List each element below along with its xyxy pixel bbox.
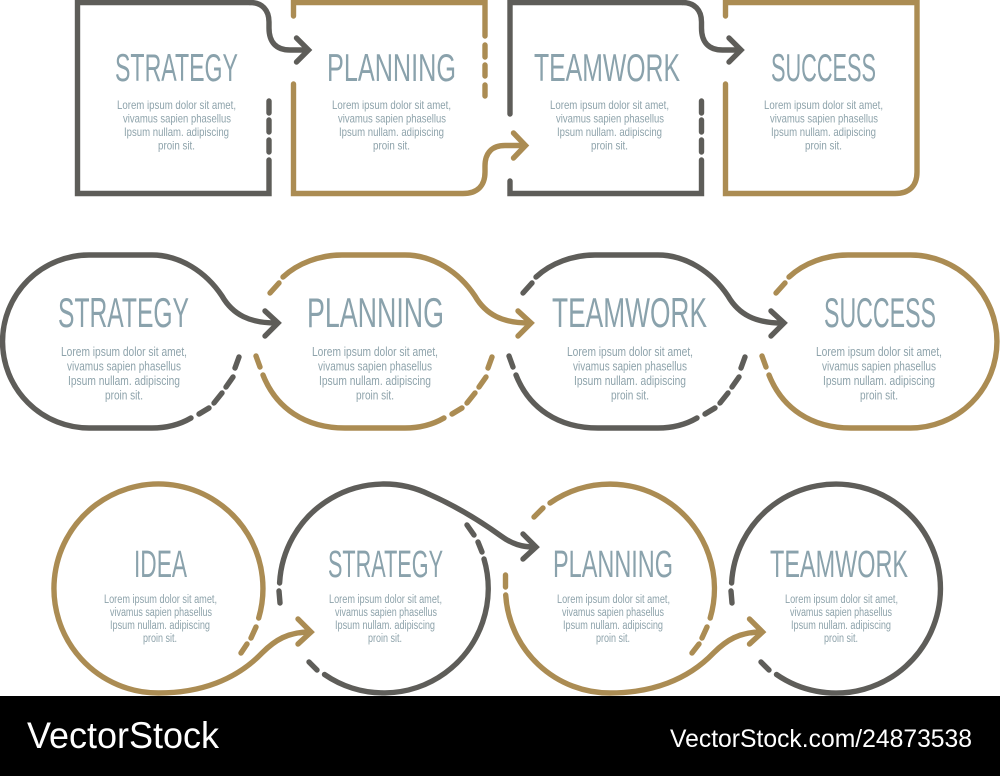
- text block: planning description: [312, 344, 438, 402]
- text block: success description: Lorem ipsum dolor sit amet,: [816, 344, 942, 359]
- text block: planning description: vivamus sapien phasellus: [318, 358, 432, 374]
- text block: teamwork description: vivamus sapien phasellus: [573, 358, 687, 374]
- text block: strategy description: Lorem ipsum dolor sit amet,: [117, 98, 236, 112]
- step shape: teamwork stadium: [509, 255, 784, 428]
- text block: planning description: vivamus sapien phasellus: [338, 112, 446, 126]
- step box: strategy square: [78, 2, 308, 194]
- text block: success description: proin sit.: [805, 138, 842, 152]
- text block: idea description: vivamus sapien phasellus: [110, 607, 212, 619]
- text block: planning description: proin sit.: [356, 388, 394, 402]
- step box: planning square: [294, 2, 526, 194]
- text block: strategy description: Ipsum nullam. adipiscing: [335, 620, 435, 632]
- text block: strategy description: proin sit.: [368, 633, 402, 645]
- text block: teamwork description: proin sit.: [591, 138, 628, 152]
- text block: planning description: Lorem ipsum dolor sit amet,: [312, 344, 438, 359]
- heading: planning: PLANNING: [553, 544, 673, 586]
- heading: strategy: STRATEGY: [58, 289, 189, 336]
- footer url text: VectorStock.com/24873538: [670, 725, 972, 753]
- heading: teamwork: TEAMWORK: [534, 47, 680, 90]
- text block: idea description: Ipsum nullam. adipiscing: [110, 620, 210, 632]
- text block: success description: Lorem ipsum dolor sit amet,: [764, 98, 883, 112]
- heading: strategy: STRATEGY: [115, 47, 238, 90]
- panel: bottom row circular steps: [54, 484, 940, 693]
- step shape: success stadium: [762, 255, 997, 428]
- text block: teamwork description: Ipsum nullam. adipiscing: [557, 125, 662, 139]
- text block: idea description: proin sit.: [143, 633, 177, 645]
- text block: planning description: Ipsum nullam. adipiscing: [563, 620, 663, 632]
- heading: planning: PLANNING: [327, 47, 456, 90]
- text block: teamwork description: vivamus sapien phasellus: [790, 607, 892, 619]
- heading: idea: IDEA: [134, 544, 187, 586]
- text block: planning description: proin sit.: [596, 633, 630, 645]
- step shape: teamwork circle: [731, 484, 940, 693]
- text block: success description: Ipsum nullam. adipiscing: [771, 125, 876, 139]
- step shape: strategy circle: [279, 484, 536, 693]
- text block: planning description: [557, 594, 670, 645]
- text block: strategy description: proin sit.: [158, 138, 195, 152]
- step box: success square: [726, 2, 917, 194]
- text block: success description: Ipsum nullam. adipiscing: [823, 373, 935, 388]
- text block: teamwork description: Ipsum nullam. adipiscing: [791, 620, 891, 632]
- heading: planning: PLANNING: [307, 289, 444, 336]
- text block: strategy description: [117, 98, 236, 152]
- text block: planning description: vivamus sapien phasellus: [562, 607, 664, 619]
- heading: strategy: STRATEGY: [328, 544, 443, 586]
- text block: teamwork description: Ipsum nullam. adipiscing: [574, 373, 686, 388]
- text block: teamwork description: [550, 98, 669, 152]
- text block: strategy description: [61, 344, 187, 402]
- heading: teamwork: TEAMWORK: [552, 289, 707, 336]
- text block: teamwork description: [567, 344, 693, 402]
- text block: strategy description: vivamus sapien phasellus: [335, 607, 437, 619]
- text block: planning description: proin sit.: [373, 138, 410, 152]
- footer band: [0, 696, 1000, 776]
- panel: middle row rounded steps: [3, 255, 997, 428]
- footer logo text: VectorStock: [27, 715, 219, 756]
- text block: strategy description: vivamus sapien phasellus: [123, 112, 231, 126]
- text block: strategy description: proin sit.: [105, 388, 143, 402]
- text block: strategy description: Ipsum nullam. adipiscing: [68, 373, 180, 388]
- text block: teamwork description: Lorem ipsum dolor sit amet,: [785, 594, 898, 606]
- panel: top row square steps: [78, 2, 917, 194]
- text block: success description: [816, 344, 942, 402]
- step shape: idea circle: [54, 484, 311, 693]
- text block: idea description: Lorem ipsum dolor sit amet,: [104, 594, 217, 606]
- text block: planning description: Ipsum nullam. adipiscing: [339, 125, 444, 139]
- text block: teamwork description: vivamus sapien phasellus: [556, 112, 664, 126]
- text block: strategy description: Ipsum nullam. adipiscing: [124, 125, 229, 139]
- text block: strategy description: vivamus sapien phasellus: [67, 358, 181, 374]
- step box: teamwork square: [510, 2, 741, 194]
- text block: planning description: [332, 98, 451, 152]
- text block: strategy description: [329, 594, 442, 645]
- text block: teamwork description: Lorem ipsum dolor sit amet,: [550, 98, 669, 112]
- text block: teamwork description: [785, 594, 898, 645]
- text block: strategy description: Lorem ipsum dolor sit amet,: [61, 344, 187, 359]
- text block: teamwork description: Lorem ipsum dolor sit amet,: [567, 344, 693, 359]
- text block: planning description: Lorem ipsum dolor sit amet,: [557, 594, 670, 606]
- heading: teamwork: TEAMWORK: [770, 544, 908, 586]
- text block: success description: vivamus sapien phasellus: [770, 112, 878, 126]
- text block: success description: [764, 98, 883, 152]
- text block: planning description: Lorem ipsum dolor sit amet,: [332, 98, 451, 112]
- step shape: planning stadium: [256, 255, 531, 428]
- text block: success description: vivamus sapien phasellus: [822, 358, 936, 374]
- text block: planning description: Ipsum nullam. adipiscing: [319, 373, 431, 388]
- step shape: strategy stadium: [3, 255, 278, 428]
- heading: success: SUCCESS: [771, 47, 876, 90]
- step shape: planning circle: [506, 484, 762, 693]
- text block: strategy description: Lorem ipsum dolor sit amet,: [329, 594, 442, 606]
- text block: idea description: [104, 594, 217, 645]
- text block: success description: proin sit.: [860, 388, 898, 402]
- text block: teamwork description: proin sit.: [824, 633, 858, 645]
- text block: teamwork description: proin sit.: [611, 388, 649, 402]
